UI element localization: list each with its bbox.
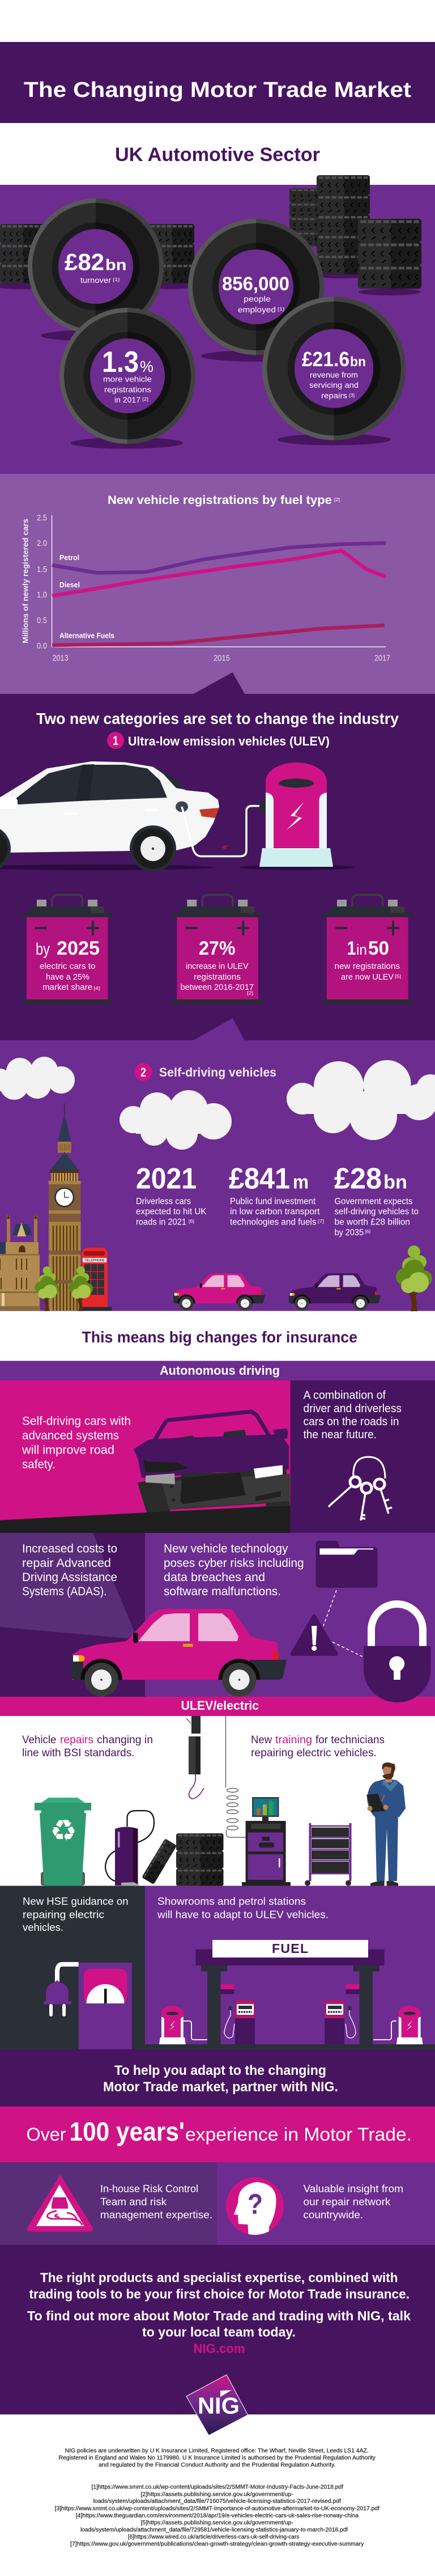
illustration: trees bbox=[35, 1245, 432, 1311]
subheading: ULEV: Ultra-low emission vehicles (ULEV) bbox=[128, 734, 330, 748]
stat text: 27% bbox=[199, 938, 236, 959]
text: cyber risks bbox=[164, 1542, 304, 1598]
panel: HSE guidance bbox=[0, 1886, 145, 2049]
text: showrooms: Showrooms and petrol stations bbox=[157, 1896, 306, 1907]
x axis labels: 2017 bbox=[374, 653, 390, 663]
stat text: [4] bbox=[94, 986, 100, 991]
line chart bbox=[20, 513, 390, 663]
text: training: for technicians bbox=[315, 1734, 385, 1746]
stat: £21.6bn: repairs bbox=[321, 391, 347, 400]
illustration: charging cable bbox=[182, 806, 259, 856]
series labels: Petrol bbox=[59, 553, 79, 562]
text: partner: To help you adapt to the changing bbox=[114, 2063, 326, 2078]
text: risk control bbox=[100, 2183, 212, 2221]
text: HSE: repairing electric bbox=[23, 1909, 104, 1921]
stat: £841m: Public fund investment bbox=[230, 1197, 316, 1206]
line: diesel bbox=[52, 550, 386, 596]
icon: head with question mark bbox=[226, 2177, 284, 2235]
panel: cyber risks bbox=[71, 1533, 435, 1702]
text: closing: The right products and specialist expertise, combined with bbox=[40, 2270, 398, 2285]
x axis labels: 2015 bbox=[214, 653, 230, 663]
subheading: self-driving: Self-driving vehicles bbox=[159, 1065, 276, 1079]
stat text: [2] bbox=[247, 991, 253, 995]
icon: slippery road sign bbox=[27, 2175, 93, 2231]
stat: £841m: £841 bbox=[229, 1162, 290, 1195]
text: combination bbox=[304, 1389, 402, 1441]
stat: £21.6bn bbox=[302, 348, 366, 400]
references: [3]https://www.smmt.co.uk/wp-content/uploads/sites/2/SMMT-Importance-of-automotive-aftermarket-to-UK-economy-2017.pdf bbox=[54, 2506, 379, 2512]
illustration: charging point bbox=[239, 762, 355, 870]
text: ADAS: Systems (ADAS). bbox=[22, 1585, 106, 1598]
stat: 2021: 2021 bbox=[136, 1162, 197, 1195]
stat text: registrations bbox=[194, 973, 241, 982]
stat text: 1 bbox=[347, 938, 356, 959]
line: alternative fuels bbox=[52, 625, 385, 645]
stat: 1.3%: registrations bbox=[104, 385, 151, 394]
text: showrooms bbox=[157, 1896, 329, 1921]
references: [7]https://www.gov.uk/government/publications/clean-growth-strategy/clean-growth-strategy-executive-summary bbox=[70, 2541, 364, 2548]
heading: two new categories: Two new categories are set to change the industry bbox=[36, 710, 399, 727]
stat text: between 2016-2017 bbox=[180, 983, 254, 992]
stat: 856,000: employed bbox=[238, 305, 276, 314]
text: experience: Over bbox=[26, 2124, 66, 2145]
tyre: people employed bbox=[188, 219, 324, 362]
stat text bbox=[36, 938, 100, 992]
y axis tick labels: 0.0 bbox=[37, 641, 47, 651]
stat: 2021: roads in 2021 bbox=[136, 1218, 186, 1227]
text: combination: A combination of bbox=[304, 1389, 386, 1401]
subheading: self-driving bbox=[135, 1064, 276, 1081]
stat: £28bn bbox=[334, 1162, 419, 1238]
icon: keys bbox=[329, 1457, 392, 1520]
stat: £28bn: by 2035 bbox=[334, 1228, 364, 1238]
panel: registrations chart bbox=[0, 474, 435, 694]
panel: workshop bbox=[22, 1716, 406, 1886]
stat: £841m: [7] bbox=[318, 1219, 324, 1224]
bar: Autonomous driving bbox=[0, 1361, 435, 1380]
illustration: car viewed from front bbox=[0, 1412, 291, 1533]
stat: £21.6bn: [3] bbox=[349, 393, 355, 398]
stat: £21.6bn: revenue from bbox=[310, 370, 358, 379]
tyre: turnover bbox=[28, 198, 164, 341]
stat text: [5] bbox=[395, 974, 401, 979]
text: risk control: Team and risk bbox=[100, 2196, 167, 2208]
text: self-driving safety bbox=[22, 1415, 131, 1471]
text: HSE bbox=[23, 1896, 128, 1933]
arrow notch bbox=[194, 672, 245, 694]
references: [4]https://www.theguardian.com/environment/2018/apr/19/e-vehicles-electric-cars-uk-sales-rise-norway-china bbox=[76, 2513, 359, 2519]
illustration: Big Ben bbox=[49, 1103, 80, 1311]
stat: £841m: m bbox=[293, 1171, 309, 1193]
text: experience bbox=[26, 2117, 412, 2146]
text: repairs: changing in bbox=[97, 1734, 153, 1746]
battery: by 2025 bbox=[22, 895, 112, 1004]
tyre: vehicle registrations bbox=[59, 308, 195, 449]
legal text bbox=[59, 2448, 376, 2468]
panel: driver and driverless bbox=[290, 1380, 435, 1533]
references: [1]https://www.smmt.co.uk/wp-content/uploads/sites/2/SMMT-Motor-Industry-Facts-June-2018.pdf bbox=[92, 2484, 343, 2490]
series labels: Alternative Fuels bbox=[59, 632, 114, 639]
logo: NIG: NIG bbox=[198, 2392, 240, 2418]
legal text: NIG policies are underwritten by U K Insurance Limited, Registered office: The Wharf, Neville Street, Leeds LS1 4AZ. bbox=[65, 2448, 369, 2454]
text: cyber risks: software malfunctions. bbox=[164, 1585, 281, 1598]
text: partner: Motor Trade market, partner with NIG. bbox=[103, 2079, 338, 2095]
stat text: increase in ULEV bbox=[186, 962, 249, 971]
chart title: New vehicle registrations by fuel type bbox=[108, 494, 332, 507]
panel: partner with NIG bbox=[0, 2049, 435, 2107]
stat: £28bn: Government expects bbox=[334, 1197, 413, 1206]
panel: showrooms and petrol stations bbox=[132, 1886, 435, 2049]
text: self-driving safety: advanced systems bbox=[22, 1429, 119, 1442]
illustration: Parliament building bbox=[0, 1213, 40, 1311]
y axis tick labels: 1.0 bbox=[37, 590, 47, 600]
illustration: coiled cable bbox=[225, 1716, 246, 1837]
panel: self-driving vehicles bbox=[0, 1018, 435, 1311]
text: showrooms: will have to adapt to ULEV vehicles. bbox=[157, 1909, 329, 1921]
stat text bbox=[180, 938, 254, 995]
text: cyber risks: data breaches and bbox=[164, 1571, 265, 1584]
illustration: hoist bbox=[186, 1716, 204, 1799]
stat text: 2025 bbox=[57, 938, 100, 959]
subheading: ULEV: 1 bbox=[113, 734, 118, 748]
stat text: market share bbox=[42, 983, 92, 992]
stat: £82bn bbox=[65, 248, 127, 285]
text: HSE: vehicles. bbox=[23, 1922, 63, 1933]
stat: 856,000: 856,000 bbox=[222, 273, 289, 295]
stat: 1.3%: more vehicle bbox=[103, 374, 152, 383]
references: [6]https://www.wired.co.uk/article/driverless-cars-uk-self-driving-cars bbox=[128, 2534, 299, 2540]
text: repairs: Vehicle bbox=[22, 1734, 57, 1746]
stat: 2021: Driverless cars bbox=[136, 1197, 191, 1206]
stat: £82bn: turnover bbox=[80, 276, 111, 285]
text: repairs bbox=[22, 1734, 153, 1759]
text: closing bbox=[27, 2270, 411, 2339]
references: loads/system/uploads/attachment_data/file/716075/vehicle-licensing-statistics-2017-revised.pdf bbox=[93, 2498, 341, 2505]
text: repairs: line with BSI standards. bbox=[22, 1747, 135, 1759]
stat: 856,000: [1] bbox=[278, 307, 284, 312]
references bbox=[54, 2484, 379, 2548]
icon: warning triangle bbox=[291, 1615, 338, 1656]
text: cyber risks: poses cyber risks including bbox=[164, 1557, 304, 1570]
text: experience: experience in Motor Trade. bbox=[185, 2124, 412, 2145]
references: [5]https://assets.publishing.service.gov.uk/government/up- bbox=[140, 2520, 293, 2526]
bar label: ULEV/electric bbox=[181, 1698, 259, 1713]
icon: folder bbox=[316, 1541, 377, 1588]
logo: NIG bbox=[186, 2375, 248, 2435]
stat: £28bn: £28 bbox=[334, 1162, 382, 1195]
panel: ADAS repair costs bbox=[0, 1533, 145, 1697]
road bbox=[0, 1506, 291, 1533]
series labels bbox=[59, 553, 114, 639]
stat: 1.3%: % bbox=[140, 358, 153, 375]
panel: closing message bbox=[0, 2245, 435, 2414]
text: repairs: repairs bbox=[60, 1734, 93, 1746]
text: self-driving safety: safety. bbox=[22, 1458, 56, 1471]
text: repair network: countrywide. bbox=[304, 2209, 363, 2221]
stat: £28bn: self-driving vehicles to bbox=[334, 1207, 419, 1217]
stat: £28bn: be worth £28 billion bbox=[334, 1218, 410, 1227]
y axis title: Millions of newly registered cars bbox=[20, 519, 29, 643]
chart title: [2] bbox=[334, 497, 340, 502]
main title: The Changing Motor Trade Market bbox=[24, 78, 411, 102]
sign text: FUEL bbox=[272, 1941, 308, 1956]
y axis tick labels bbox=[37, 513, 47, 651]
stat: £28bn: bn bbox=[383, 1171, 407, 1193]
line: petrol bbox=[52, 543, 386, 573]
heading: big changes for insurance: This means big changes for insurance bbox=[82, 1328, 357, 1346]
illustration: pink car bbox=[173, 1273, 265, 1311]
tyre stacks bbox=[0, 175, 421, 295]
illustration: electric car bbox=[0, 761, 230, 872]
stat text: electric cars to bbox=[40, 962, 95, 971]
text: ADAS: Increased costs to bbox=[22, 1542, 117, 1556]
stat: £82bn: [1] bbox=[113, 277, 120, 282]
legal text: Registered in England and Wales No 1179980. U K Insurance Limited is authorised by the Prudential Regulation Authority bbox=[59, 2455, 376, 2461]
panel: repair network insight bbox=[217, 2162, 435, 2245]
stat text bbox=[334, 938, 401, 982]
text: cyber risks: New vehicle technology bbox=[164, 1542, 288, 1556]
panel: self-driving safety bbox=[0, 1380, 291, 1533]
panel: risk control bbox=[0, 2162, 217, 2245]
stat: 2021 bbox=[136, 1162, 207, 1227]
stat: 2021: expected to hit UK bbox=[136, 1207, 207, 1217]
icon: recycling symbol: ♻ bbox=[50, 1814, 77, 1848]
illustration: diagnostic machine bbox=[242, 1797, 291, 1886]
icon: padlock bbox=[364, 1604, 430, 1702]
text: ADAS: Driving Assistance bbox=[22, 1571, 117, 1584]
text: closing: to your local team today. bbox=[142, 2324, 296, 2339]
text: risk control: management expertise. bbox=[100, 2209, 212, 2221]
stat: £841m: technologies and fuels bbox=[230, 1218, 317, 1227]
legal text: and regulated by the Financial Conduct Authority and the Prudential Regulation Authority. bbox=[99, 2462, 335, 2468]
illustration: trolley bbox=[305, 1823, 351, 1886]
stat: £28bn: [6] bbox=[365, 1229, 370, 1234]
text: closing: To find out more about Motor Trade and trading with NIG, talk bbox=[27, 2308, 411, 2323]
stat text: 50 bbox=[368, 938, 389, 959]
stat: £21.6bn: servicing and bbox=[309, 380, 359, 389]
text: training: repairing electric vehicles. bbox=[251, 1747, 377, 1759]
text: ADAS bbox=[22, 1542, 117, 1598]
text: partner bbox=[103, 2063, 338, 2095]
y axis tick labels: 2.5 bbox=[37, 513, 47, 523]
stat: 2021: [6] bbox=[189, 1219, 194, 1224]
dashed connectors bbox=[323, 1590, 362, 1656]
tyre: servicing revenue bbox=[262, 296, 406, 446]
stat: 1.3%: [2] bbox=[142, 397, 148, 402]
illustration: tyres bbox=[142, 1833, 223, 1886]
text: ADAS: repair Advanced bbox=[22, 1557, 111, 1570]
text: self-driving safety: will improve road bbox=[22, 1443, 114, 1457]
text: risk control: In-house Risk Control bbox=[100, 2183, 198, 2194]
text: repair network: Valuable insight from bbox=[304, 2183, 403, 2194]
y axis tick labels: 2.0 bbox=[37, 539, 47, 548]
stat: £841m bbox=[229, 1162, 324, 1227]
stat: £21.6bn: bn bbox=[350, 354, 366, 370]
series labels: Diesel bbox=[59, 581, 80, 589]
heading: UK Automotive Sector: UK Automotive Sector bbox=[115, 144, 320, 166]
references: loads/system/uploads/attachment_data/file/729581/vehicle-licensing-statistics-january-to-march-2018.pdf bbox=[80, 2527, 348, 2533]
clouds bbox=[0, 1057, 435, 1150]
bar: ULEV/electric bbox=[0, 1697, 435, 1716]
x axis labels bbox=[52, 653, 390, 663]
stat: 1.3%: 1.3 bbox=[102, 346, 139, 379]
text: combination: the near future. bbox=[304, 1429, 377, 1441]
illustration: technician bbox=[366, 1762, 406, 1886]
arrow notch bbox=[193, 1018, 245, 1041]
icon: head with question mark: ? bbox=[248, 2188, 263, 2220]
illustration: telephone box: TELEPHONE bbox=[84, 1259, 105, 1262]
y axis tick labels: 1.5 bbox=[37, 565, 47, 574]
illustration: diagnostic unit with cable bbox=[105, 1811, 154, 1886]
y axis tick labels: 0.5 bbox=[37, 616, 47, 625]
panel: two new categories / ULEV bbox=[0, 672, 435, 1040]
illustration: fuel pumps bbox=[224, 2000, 356, 2044]
stat: 856,000: people bbox=[244, 294, 271, 303]
text: self-driving safety: Self-driving cars with bbox=[22, 1415, 131, 1427]
text: experience: 100 years' bbox=[69, 2117, 185, 2146]
text: combination: driver and driverless bbox=[304, 1403, 402, 1415]
text: training bbox=[251, 1734, 385, 1759]
stat text: are now ULEV bbox=[341, 973, 394, 982]
text: repair network: our repair network bbox=[304, 2196, 391, 2208]
banner: 100 years experience bbox=[0, 2107, 435, 2162]
illustration: small chargers bbox=[159, 2006, 423, 2044]
stat: £82bn: £82 bbox=[65, 248, 104, 276]
stat text: in bbox=[356, 941, 367, 958]
subheading: self-driving: 2 bbox=[140, 1065, 146, 1079]
text: closing: trading tools to be your first choice for Motor Trade insurance. bbox=[29, 2287, 410, 2302]
text: HSE: New HSE guidance on bbox=[23, 1896, 128, 1907]
stat text: have a 25% bbox=[46, 973, 89, 982]
battery: 27% bbox=[172, 895, 263, 1004]
stat: 856,000 bbox=[222, 273, 289, 314]
references: [2]https://assets.publishing.service.gov.uk/government/up- bbox=[140, 2492, 293, 2498]
bar label: Autonomous driving bbox=[160, 1363, 280, 1378]
battery: 1 in 50 bbox=[322, 895, 412, 1004]
illustration: fuel station canopy bbox=[196, 1940, 384, 2044]
headlight beam bbox=[0, 1533, 135, 1638]
panel: sector stats on tyres bbox=[0, 175, 435, 474]
stat: 1.3%: in 2017 bbox=[114, 395, 140, 404]
stat text: by bbox=[36, 940, 50, 959]
illustration: purple car bbox=[289, 1273, 381, 1311]
illustration: pink car bbox=[71, 1609, 287, 1697]
stat: £21.6bn: £21.6 bbox=[302, 348, 349, 371]
title banner bbox=[0, 42, 435, 123]
illustration: plug and meter bbox=[44, 1963, 132, 2049]
link: NIG.com: NIG.com bbox=[194, 2341, 245, 2356]
stat text: new registrations bbox=[334, 962, 400, 971]
stat: £82bn: bn bbox=[105, 256, 127, 273]
text: training: training bbox=[275, 1734, 312, 1746]
stat: 1.3% bbox=[102, 346, 153, 404]
illustration: recycling bin bbox=[35, 1798, 91, 1886]
text: combination: cars on the roads in bbox=[304, 1416, 399, 1428]
x axis labels: 2013 bbox=[52, 653, 68, 663]
text: training: New bbox=[251, 1734, 272, 1746]
text: repair network bbox=[304, 2183, 403, 2221]
stat: £841m: in low carbon transport bbox=[230, 1207, 320, 1217]
illustration: telephone box bbox=[82, 1248, 112, 1311]
